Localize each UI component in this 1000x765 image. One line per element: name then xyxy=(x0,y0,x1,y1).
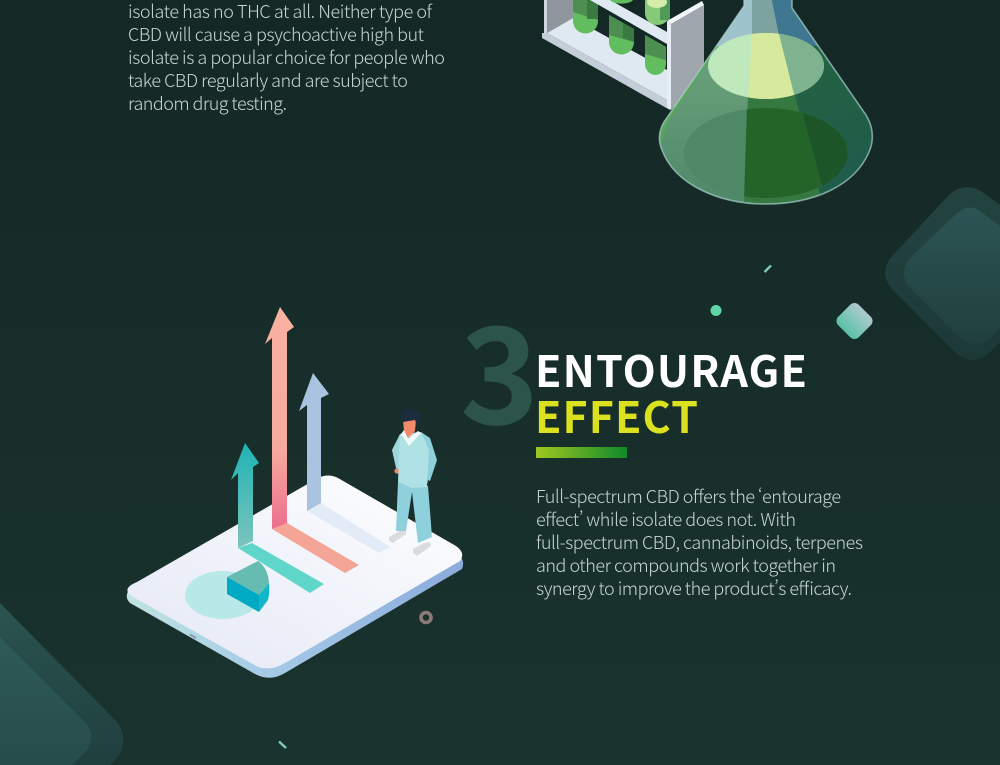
accent: green dot xyxy=(710,305,722,316)
text block: isolate description: random drug testing. xyxy=(128,90,287,116)
shirt xyxy=(398,432,429,488)
accent: small dash bottom xyxy=(279,742,286,748)
lower liquid ellipse xyxy=(680,105,850,200)
hands xyxy=(394,468,428,484)
accent: ring xyxy=(421,612,431,622)
upper liquid ellipse xyxy=(708,33,824,99)
text block: entourage description: full-spectrum CBD, cannabinoids, terpenes xyxy=(536,529,863,555)
flask neck xyxy=(716,0,818,47)
heading: entourage effect xyxy=(535,338,807,446)
accent: small dash top xyxy=(764,266,771,272)
pie wedge block xyxy=(227,561,269,612)
blue arrow xyxy=(299,373,390,553)
decorative diamond: right xyxy=(885,187,1000,360)
tablet xyxy=(127,476,463,678)
test tube 1 xyxy=(573,0,598,33)
teal arrow xyxy=(231,443,324,593)
heading: entourage effect: EFFECT xyxy=(535,384,698,446)
hair xyxy=(401,409,420,425)
decorative diamond: bottom left xyxy=(0,603,124,765)
trousers xyxy=(396,482,432,543)
middle shelf xyxy=(590,0,667,44)
section number 3: 3 xyxy=(460,269,539,463)
text block: entourage description: Full-spectrum CBD offers the ‘entourage xyxy=(536,483,841,509)
right rack panel xyxy=(667,1,704,110)
neck and face xyxy=(403,420,416,438)
flask glass sections xyxy=(659,0,872,204)
illustration: test tube rack xyxy=(542,0,704,110)
heading: entourage effect: ENTOURAGE xyxy=(535,338,807,400)
text block: entourage description: effect’ while isolate does not. With xyxy=(536,506,796,532)
text block: isolate description: take CBD regularly and are subject to xyxy=(128,67,408,93)
text block: entourage description: synergy to improve the product’s efficacy. xyxy=(536,575,852,601)
text block: isolate description: CBD will cause a psychoactive high but xyxy=(128,21,425,47)
text block: isolate description: isolate is a popular choice for people who xyxy=(128,44,445,70)
collar xyxy=(401,430,421,446)
pink arrow xyxy=(265,307,359,573)
person xyxy=(389,409,437,556)
illustration: tablet with growth arrows xyxy=(127,307,463,678)
accent: teal diamond xyxy=(834,300,875,342)
heading underline xyxy=(536,447,627,458)
shoes xyxy=(389,530,431,556)
illustration: erlenmeyer flask xyxy=(658,0,874,205)
test tube 3 xyxy=(645,35,666,75)
test tube 2 xyxy=(609,15,634,54)
arms xyxy=(392,432,437,481)
upper tubes xyxy=(610,0,670,25)
speaker mark xyxy=(190,634,196,638)
text block: entourage description: and other compounds work together in xyxy=(536,552,836,578)
pie base xyxy=(185,571,261,619)
